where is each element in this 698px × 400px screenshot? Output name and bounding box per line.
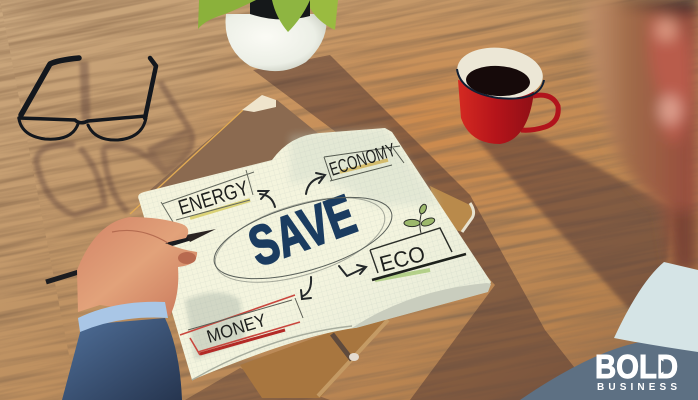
label: money: MONEY [204, 310, 269, 347]
oval around save [205, 181, 401, 299]
open notebook [138, 128, 491, 380]
eyeglasses [19, 58, 156, 140]
man's blurred head [586, 0, 698, 272]
brown folder under notebook [130, 95, 474, 398]
label: money [180, 295, 303, 355]
label: energy [161, 170, 254, 222]
heading: save: SAVE [241, 182, 364, 278]
label: economy [324, 140, 404, 181]
label: eco with sprout: ECO [377, 241, 428, 277]
man's shirt collar and suit shoulder [520, 262, 698, 400]
potted plant [198, 0, 338, 71]
coffee cup [454, 43, 558, 144]
lower page edge [352, 283, 491, 328]
label: eco with sprout [370, 203, 466, 280]
icon: sprout [404, 203, 436, 233]
logo: bold business: BUSINESS [597, 382, 677, 393]
cast shadows on desk [36, 55, 672, 400]
suit sleeve with shirt cuff [62, 302, 182, 400]
page shadows [185, 292, 245, 360]
pencil [46, 229, 216, 282]
label: economy: ECONOMY [327, 140, 398, 181]
label: energy: ENERGY [176, 177, 251, 220]
arrows [258, 173, 366, 299]
logo: bold business: BOLD [595, 348, 678, 385]
hand holding pencil [77, 217, 197, 316]
